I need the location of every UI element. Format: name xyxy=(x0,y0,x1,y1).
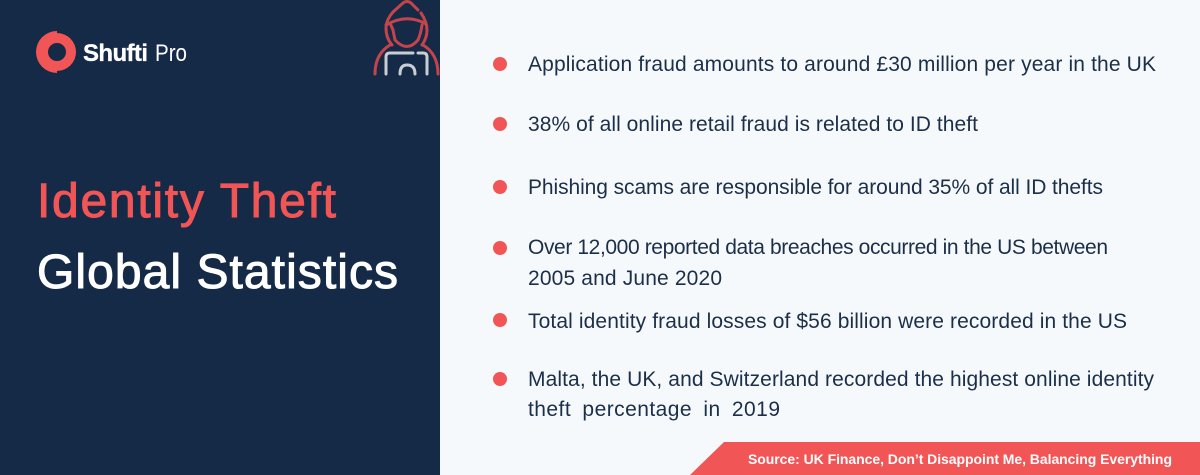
stat 4: Over 12,000 reported data breaches occurred in the US between xyxy=(528,236,1108,259)
source banner xyxy=(690,442,1200,475)
stat 6: theft percentage in 2019 xyxy=(528,398,780,421)
title xyxy=(37,175,398,299)
stat 3: Phishing scams are responsible for around 35% of all ID thefts xyxy=(528,176,1103,199)
stat 6: Malta, the UK, and Switzerland recorded the highest online identity xyxy=(528,368,1154,391)
logo wordmark: Pro xyxy=(155,40,187,67)
stat 5: Total identity fraud losses of $56 billion were recorded in the US xyxy=(528,310,1127,333)
logo wordmark: Shufti xyxy=(83,40,148,67)
stat 2: 38% of all online retail fraud is related to ID theft xyxy=(528,113,978,136)
statistics list xyxy=(493,53,1156,421)
icon: Shufti Pro logo ring xyxy=(36,31,76,73)
title line: Identity Theft: Identity Theft xyxy=(37,175,336,228)
stat 4 xyxy=(493,236,1108,290)
source banner: Source: UK Finance, Don’t Disappoint Me, Balancing Everything xyxy=(748,451,1172,467)
panel: left navy xyxy=(0,0,440,475)
stat 6 xyxy=(493,368,1154,421)
stat 4: 2005 and June 2020 xyxy=(528,267,722,290)
logo wordmark xyxy=(83,40,187,67)
stat 1: Application fraud amounts to around £30 million per year in the UK xyxy=(528,53,1156,76)
title line: Global Statistics: Global Statistics xyxy=(37,246,398,299)
icon: hooded hacker xyxy=(375,2,438,74)
